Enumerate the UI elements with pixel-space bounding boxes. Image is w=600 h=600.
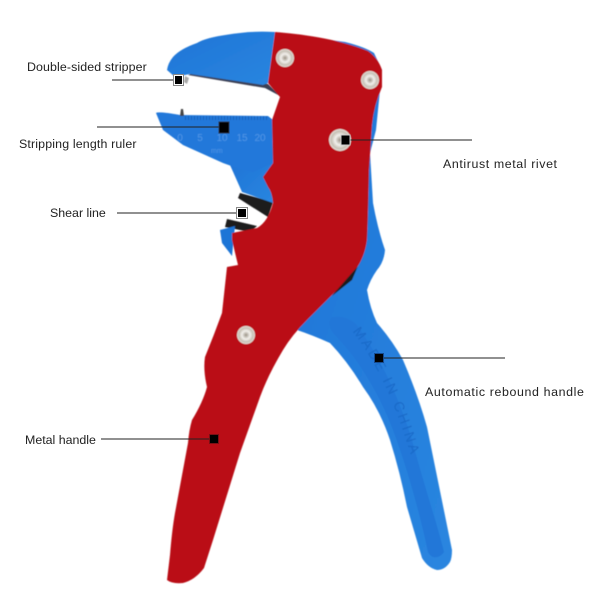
callout: automatic rebound handle: Automatic rebound handle [425, 385, 585, 399]
callout: metal handle [25, 433, 218, 447]
double-sided stripper jaw [167, 32, 280, 96]
callout: metal handle: Metal handle [25, 433, 96, 447]
blue rebound handle [297, 36, 452, 570]
stripping length ruler: 5 [197, 133, 203, 144]
handle lettering: MADE IN CHINA [354, 327, 418, 454]
callout: double-sided stripper [27, 60, 184, 86]
illustration: wire stripper tool [155, 30, 453, 584]
black blades [225, 193, 358, 296]
stripping length ruler [156, 109, 273, 203]
callout: shear line [50, 206, 248, 220]
callout: double-sided stripper: Double-sided stripper [27, 60, 147, 74]
callout: shear line: Shear line [50, 206, 106, 220]
stripping length ruler: 10 [216, 133, 228, 144]
callout: automatic rebound handle [374, 354, 585, 399]
rivets [237, 49, 379, 344]
stripping length ruler: 20 [254, 133, 266, 144]
stripping length ruler: 0 [177, 133, 183, 144]
callout: antirust metal rivet [341, 135, 558, 171]
callout: stripping length ruler: Stripping length ruler [19, 137, 137, 151]
blue lower blade support [220, 226, 235, 256]
inner handle groove [329, 317, 444, 557]
red metal handle [167, 32, 382, 583]
stripping length ruler: mm [211, 148, 223, 155]
stripping length ruler: 15 [236, 133, 248, 144]
callout: antirust metal rivet: Antirust metal rivet [443, 157, 558, 171]
callout: stripping length ruler [19, 122, 229, 151]
